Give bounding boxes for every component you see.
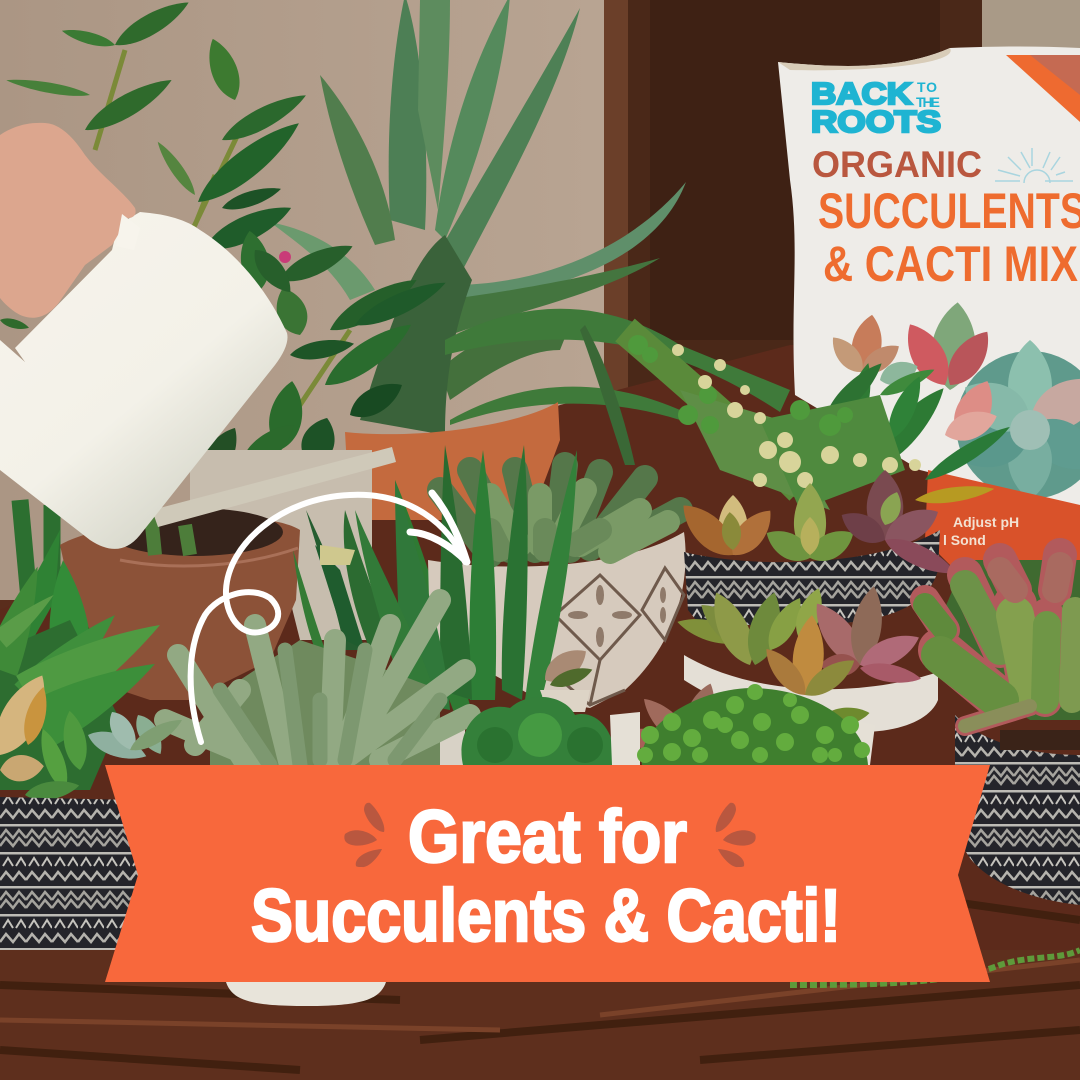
white pot foot xyxy=(226,982,386,1006)
bag corner stripe xyxy=(1006,55,1080,122)
bag orange panel: Adjust pH xyxy=(953,514,1019,530)
bag title xyxy=(812,144,1080,292)
bag orange panel xyxy=(925,470,1080,575)
door xyxy=(604,0,1080,400)
bag brand logo: THE xyxy=(916,94,940,110)
sage echeveria xyxy=(440,465,680,555)
table xyxy=(0,345,1080,1080)
small green succulent xyxy=(461,697,614,765)
can spout xyxy=(152,447,396,527)
bag brand logo: ROOTS xyxy=(811,104,941,139)
can handle tab xyxy=(116,214,140,250)
bag brand logo xyxy=(811,76,941,139)
hand xyxy=(0,123,136,318)
pointed green succulent and variegated jade xyxy=(625,330,1014,510)
banner headline xyxy=(251,795,841,957)
bag sun icon xyxy=(995,148,1073,183)
speckled aloe xyxy=(165,600,470,770)
banner headline: Great for xyxy=(408,795,687,878)
left aloe cluster xyxy=(0,530,186,804)
white low pot xyxy=(684,655,938,732)
soil bag xyxy=(778,46,1080,510)
centre succulents xyxy=(614,584,924,755)
terracotta aloe pot xyxy=(345,402,560,520)
string of pearls xyxy=(637,684,870,765)
terracotta pot xyxy=(60,505,300,700)
left sansevieria stalks xyxy=(20,500,104,615)
dark patterned pot xyxy=(684,530,940,625)
banner accent left xyxy=(344,803,384,867)
sansevieria plant back xyxy=(306,480,470,715)
white back pot xyxy=(190,450,372,640)
string of pearls sprig xyxy=(790,950,1080,985)
white pot fragments xyxy=(415,715,465,765)
right jade succulent xyxy=(925,555,1080,750)
zz plant xyxy=(0,0,450,487)
dish succulents xyxy=(673,470,995,582)
background wall xyxy=(0,0,1080,600)
small pink succulent by pot xyxy=(538,641,595,712)
snake plant stalks xyxy=(293,445,577,715)
banner accent right xyxy=(716,803,756,867)
white curved arrow xyxy=(191,493,467,742)
white patterned pot xyxy=(428,532,686,708)
left dark pot xyxy=(0,797,142,950)
bag brand logo: TO xyxy=(917,79,937,95)
banner xyxy=(105,765,990,982)
bag orange panel: l Sond xyxy=(943,532,986,548)
watering can xyxy=(0,212,396,549)
aloe plant xyxy=(270,0,790,465)
bag rosettes xyxy=(825,300,1080,500)
bag title: ORGANIC xyxy=(812,144,982,185)
bag brand logo: BACK xyxy=(811,76,913,111)
right dark pot xyxy=(955,715,1080,905)
small white pot xyxy=(610,712,875,765)
banner headline: Succulents & Cacti! xyxy=(251,874,841,957)
